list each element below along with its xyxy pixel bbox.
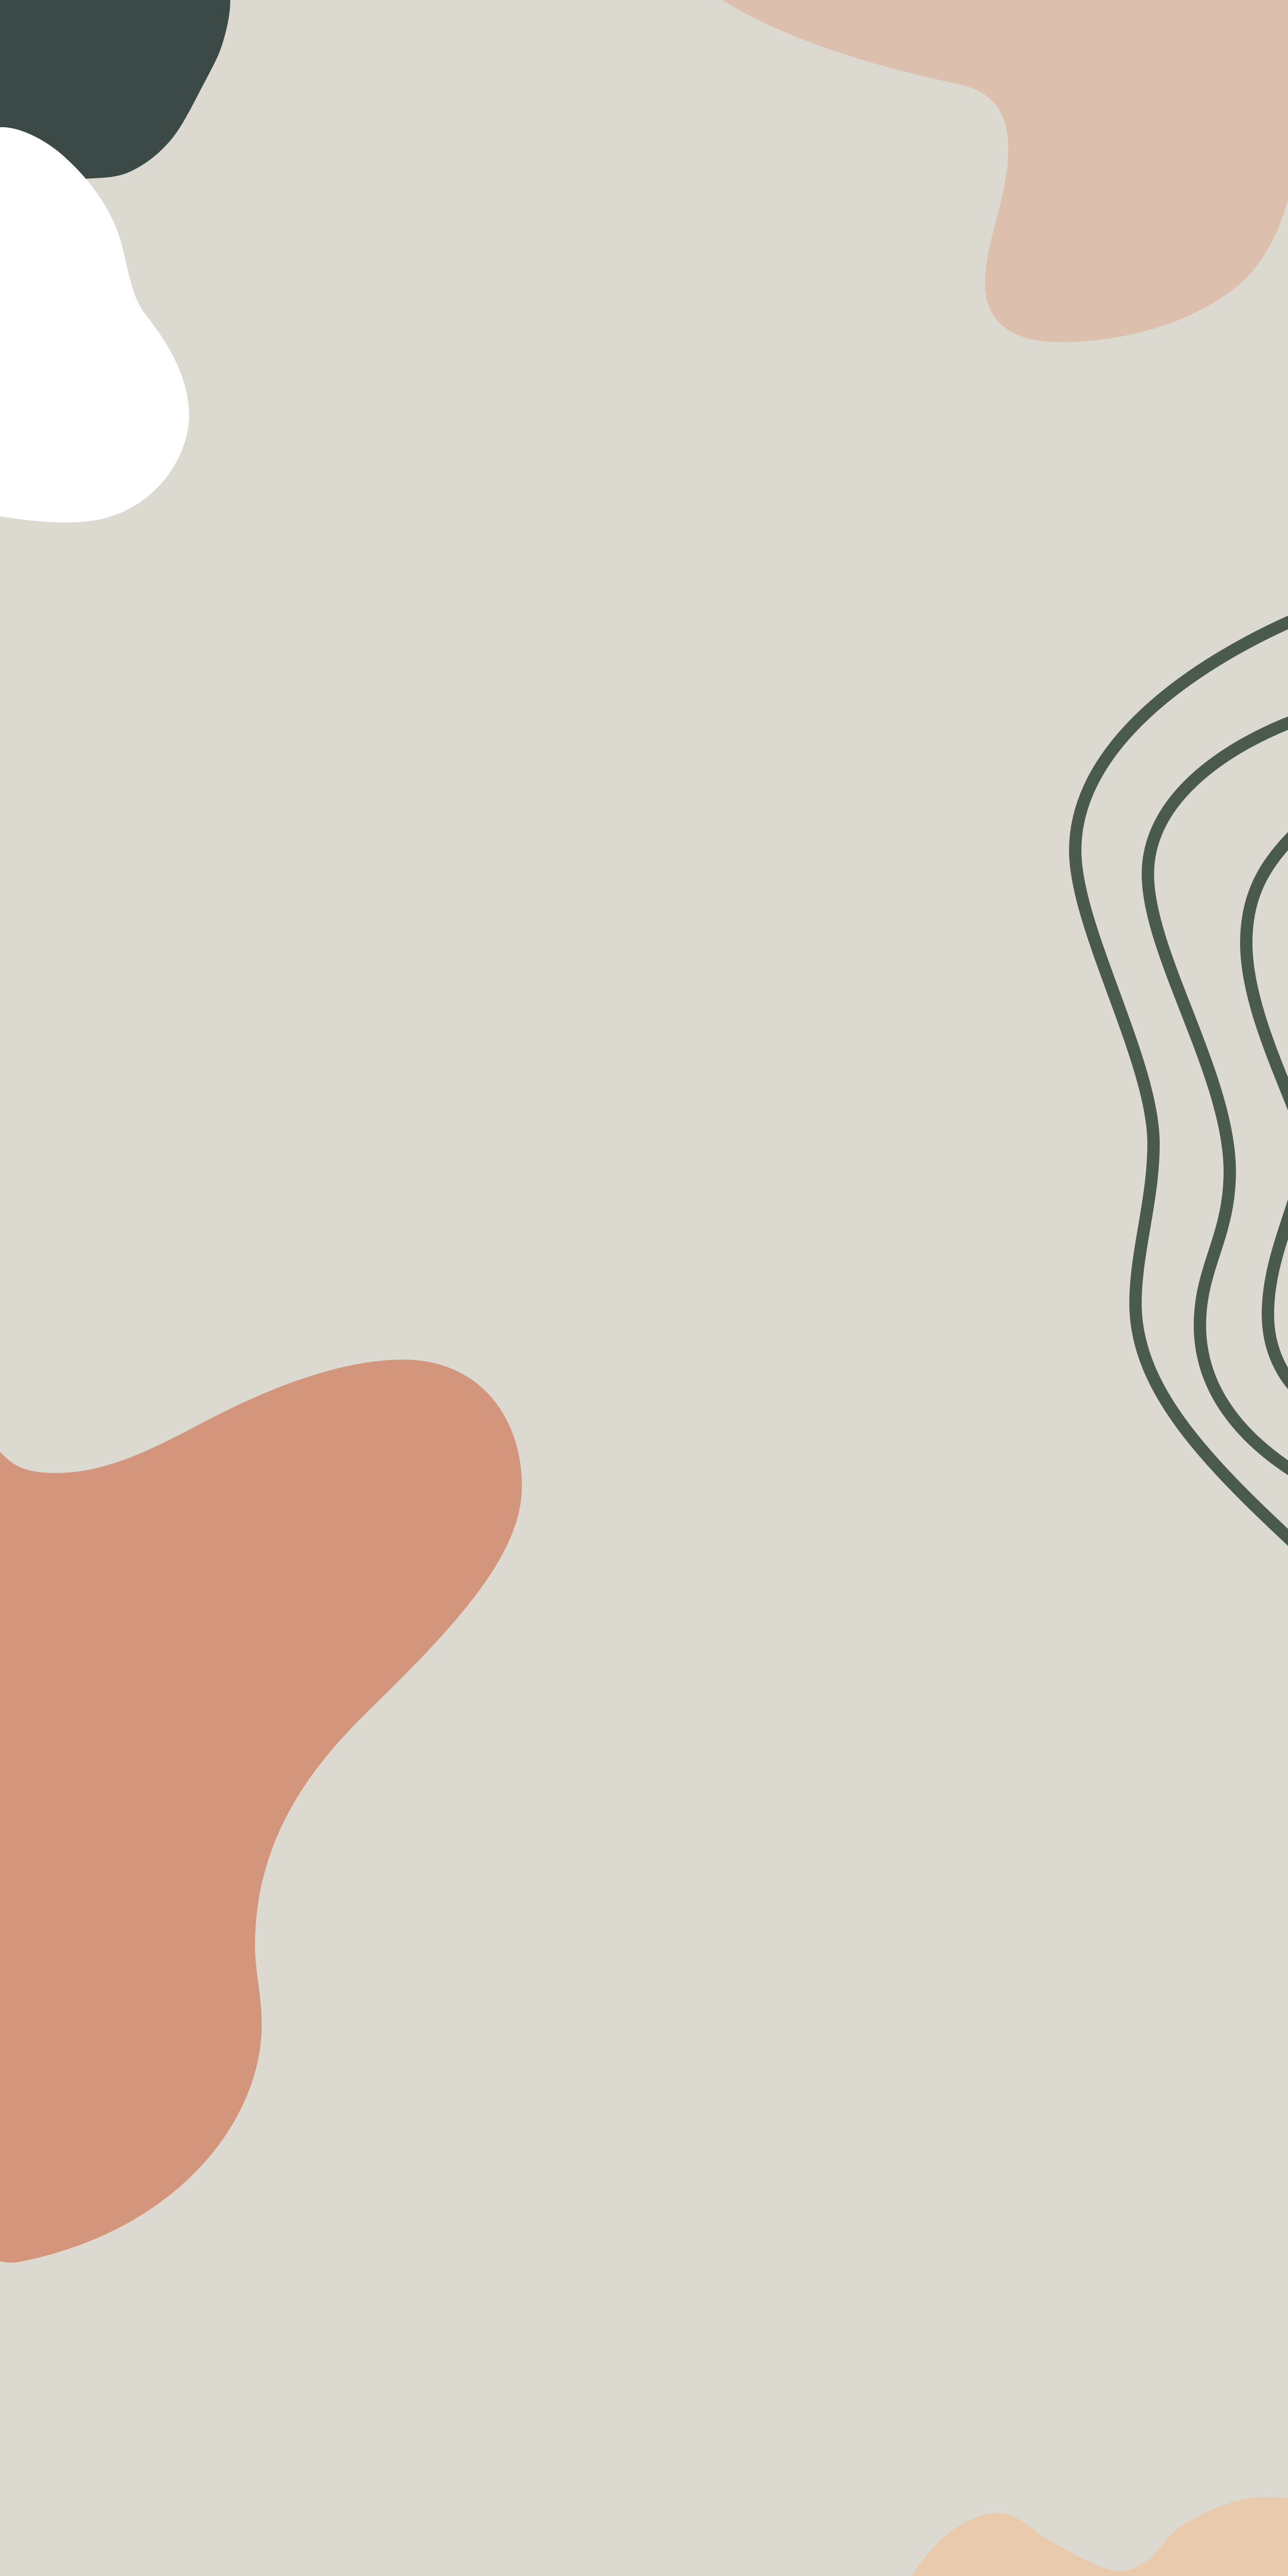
white blob top left [0, 127, 189, 522]
green contour lines right [1075, 616, 1288, 1552]
contour line outer [1075, 616, 1288, 1552]
contour line middle [1148, 719, 1288, 1478]
contour line inner lower [1268, 1195, 1288, 1396]
dark green blob top left [0, 0, 230, 206]
salmon blob left [0, 1360, 522, 2263]
peach blob bottom right [896, 2497, 1288, 2576]
pink blob top right [722, 0, 1288, 342]
contour line inner upper [1246, 825, 1288, 1133]
